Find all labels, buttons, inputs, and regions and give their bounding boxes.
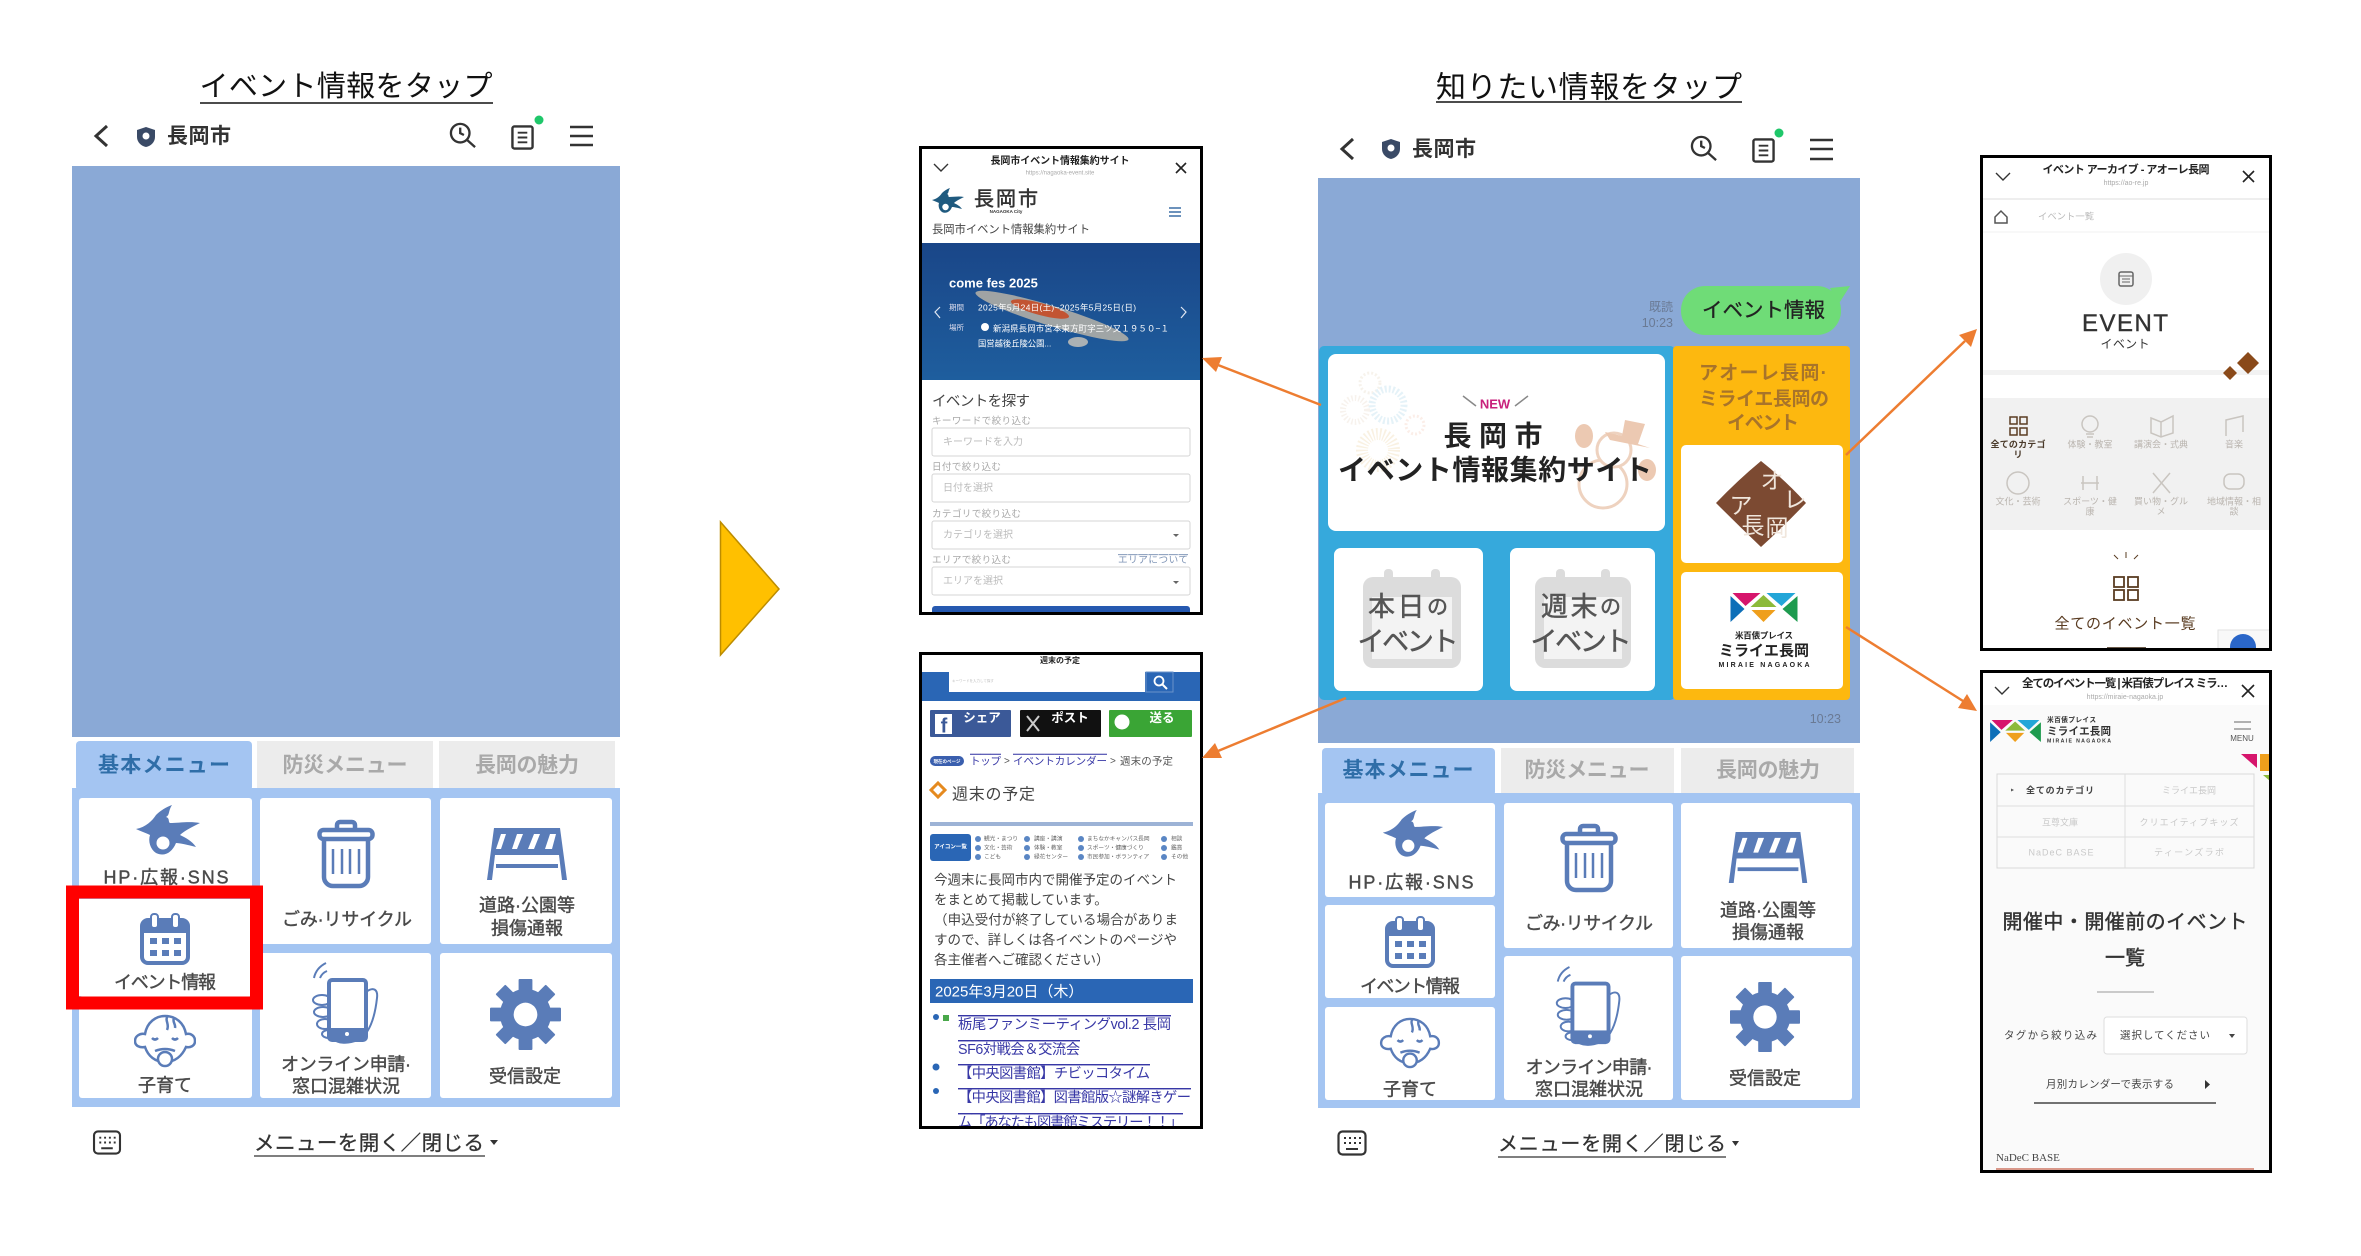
event link list: 【中央図書館】図書館版☆謎解きゲー — [958, 1089, 1191, 1106]
Miraie logo — [1990, 715, 2111, 744]
Miraie browser bar: https://miraie-nagaoka.jp — [2087, 694, 2163, 701]
right menu: online application: オンライン申請· — [1526, 1057, 1652, 1077]
breadcrumb: > — [1004, 756, 1010, 767]
yellow column caption: イベント — [1727, 413, 1799, 434]
chat bubble: 10:23 — [1642, 316, 1673, 330]
weekend page header: 週末の予定 — [1040, 655, 1080, 665]
right phone header bar — [1342, 128, 1833, 162]
left keyboard and toggle: メニューを開く／閉じる — [254, 1132, 484, 1155]
right menu tabs: 長岡の魅力 — [1716, 759, 1820, 782]
all events link — [2054, 552, 2196, 650]
category table: 互尊文庫 — [2042, 817, 2078, 828]
EVENT heading: イベント — [2100, 337, 2150, 351]
arrow: to Aore page — [1846, 329, 1977, 455]
card: Aore Nagaoka: 岡 — [1766, 515, 1788, 541]
menu: road damage report: 道路·公園等 — [479, 895, 575, 915]
panel: Miraie event list screenshot — [1982, 672, 2270, 1172]
intro paragraph: 今週末に長岡市内で開催予定のイベント — [934, 872, 1177, 887]
event search form: カテゴリで絞り込む — [932, 508, 1021, 520]
breadcrumb: 週末の予定 — [1120, 755, 1174, 768]
card: weekend events — [1510, 548, 1655, 691]
intro paragraph: （申込受付が終了している場合がありま — [934, 912, 1178, 927]
next section label: NaDeC BASE — [1996, 1152, 2060, 1164]
weekend page header: キーワードを入力して探す — [952, 678, 994, 683]
menu: garbage recycling — [260, 798, 431, 944]
left menu tabs: 基本メニュー — [98, 754, 230, 777]
event link list: 【中央図書館】チビッコタイム — [958, 1065, 1150, 1082]
right menu tabs: 基本メニュー — [1342, 759, 1474, 782]
menu button and accents: MENU — [2230, 734, 2254, 743]
social share buttons: 送る — [1149, 710, 1175, 725]
card: Miraie Nagaoka: ミライエ長岡 — [1719, 643, 1809, 660]
breadcrumb: > — [1110, 756, 1116, 767]
all events link: 全てのイベント一覧 — [2054, 616, 2196, 633]
yellow column caption: ミライエ長岡の — [1699, 389, 1829, 410]
menu: notification settings: 受信設定 — [489, 1066, 561, 1086]
menu: online application: 窓口混雑状況 — [292, 1076, 400, 1096]
Miraie logo: MIRAIE NAGAOKA — [2047, 738, 2111, 744]
menu: road damage report — [440, 798, 612, 944]
right menu: notification settings: 受信設定 — [1729, 1068, 1801, 1088]
right menu: road damage report — [1681, 803, 1852, 948]
card: weekend events: イベント — [1530, 627, 1632, 657]
intro paragraph: をまとめて掲載しています。 — [934, 892, 1108, 907]
event search form: エリアについて — [1118, 555, 1188, 566]
event link list: ム「あなたも図書館ミステリー！！」 — [958, 1114, 1183, 1131]
event rich message — [1319, 346, 1850, 700]
card: Aore Nagaoka: 長 — [1742, 513, 1764, 539]
left menu tabs: 長岡の魅力 — [475, 754, 579, 777]
right menu tabs — [1322, 748, 1854, 796]
social share buttons: f — [941, 715, 948, 737]
event search form: イベントを探す — [932, 393, 1030, 410]
menu button and accents — [2230, 722, 2270, 781]
menu: road damage report: 損傷通報 — [491, 918, 563, 938]
icon legend: 体験・教室 — [1034, 843, 1063, 851]
site logo — [932, 187, 1181, 236]
monthly calendar link — [2034, 1078, 2216, 1103]
list heading: 一覧 — [2105, 946, 2145, 969]
yellow column caption — [1699, 363, 1829, 434]
right menu: road damage report: 損傷通報 — [1732, 922, 1804, 942]
category grid: 買い物・グル — [2134, 496, 2188, 507]
right phone header bar: 長岡市 — [1412, 138, 1476, 161]
card: city event site — [1328, 354, 1665, 531]
category grid: スポーツ・健 — [2063, 496, 2117, 507]
recaptcha badge — [2218, 630, 2269, 648]
tag filter — [2004, 1017, 2247, 1054]
event search form: キーワードを入力 — [943, 435, 1023, 448]
card: Aore Nagaoka — [1681, 445, 1843, 563]
event search form: キーワードで絞り込む — [932, 415, 1031, 427]
right menu: child rearing — [1325, 1007, 1495, 1100]
menu: online application — [260, 953, 431, 1098]
right menu: notification settings — [1681, 956, 1852, 1100]
hero banner with koi: 新潟県長岡市宮本東方町字三ツ又１９５０−１ — [993, 324, 1169, 334]
right menu: HP広報SNS: HP·広報·SNS — [1348, 872, 1474, 892]
icon legend: 文化・芸術 — [984, 843, 1013, 851]
left chat area — [72, 166, 620, 737]
right menu: road damage report: 道路·公園等 — [1720, 900, 1816, 920]
hero banner with koi: 期間 — [949, 303, 964, 312]
intro paragraph — [934, 872, 1178, 967]
menu: event info: イベント情報 — [114, 972, 216, 992]
card: today's events — [1334, 548, 1483, 691]
site logo: 長岡市 — [974, 187, 1038, 210]
monthly calendar link: 月別カレンダーで表示する — [2046, 1078, 2174, 1091]
category table: ミライエ長岡 — [2162, 786, 2216, 796]
icon legend: スポーツ・健康づくり — [1087, 843, 1144, 851]
icon legend: まちなかキャンパス長岡 — [1087, 835, 1150, 842]
icon legend: その他 — [1171, 852, 1188, 860]
tag filter: タグから絞り込み — [2004, 1029, 2097, 1042]
event link list: 栃尾ファンミーティングvol.2 長岡 — [958, 1016, 1171, 1033]
category grid: 地域情報・相 — [2207, 496, 2261, 507]
menu: garbage recycling: ごみ·リサイクル — [282, 909, 412, 929]
right menu: online application: 窓口混雑状況 — [1535, 1079, 1643, 1099]
card: Aore Nagaoka: レ — [1784, 487, 1806, 513]
left rich menu grid — [72, 788, 620, 1107]
event search form — [932, 393, 1190, 618]
date bar: 2025年3月20日（木） — [935, 984, 1083, 1001]
left phone header bar: 長岡市 — [167, 125, 231, 148]
menu: child rearing — [79, 996, 252, 1098]
right menu: online application — [1504, 956, 1673, 1100]
breadcrumb: イベントカレンダー — [1013, 755, 1107, 768]
event link list — [932, 1014, 1191, 1131]
menu: online application: オンライン申請· — [281, 1054, 411, 1074]
site browser bar: https://nagaoka-event.site — [1026, 170, 1095, 176]
heading: tap info you want: 知りたい情報をタップ — [1436, 72, 1742, 105]
icon legend: こども — [984, 852, 1001, 860]
left menu tabs — [76, 741, 615, 791]
Aore browser bar — [1983, 162, 2269, 199]
date bar — [930, 979, 1193, 1003]
next section label — [1996, 1154, 2254, 1170]
category table: ティーンズラボ — [2154, 847, 2224, 858]
list heading — [2002, 910, 2248, 992]
menu: HP広報SNS — [79, 798, 252, 894]
category table: クリエイティブキッズ — [2140, 817, 2238, 828]
breadcrumb: 現在のページ — [934, 758, 961, 765]
message time: 10:23 — [1810, 712, 1841, 726]
chat bubble — [1642, 286, 1850, 335]
panel: right LINE phone screen — [1318, 128, 1860, 1157]
left phone header bar — [96, 116, 593, 149]
right chat area — [1318, 178, 1860, 743]
Aore browser bar: https://ao-re.jp — [2104, 180, 2148, 187]
Miraie logo: ミライエ長岡 — [2047, 726, 2111, 738]
right keyboard and toggle: メニューを開く／閉じる — [1498, 1133, 1726, 1155]
icon legend — [930, 834, 1188, 861]
right menu: event info — [1325, 905, 1495, 998]
right menu tabs: 防災メニュー — [1524, 759, 1650, 782]
right keyboard and toggle — [1338, 1132, 1739, 1157]
card: weekend events: 週末の — [1541, 592, 1621, 622]
category table: 全てのカテゴリ — [2026, 785, 2094, 796]
list heading: 開催中・開催前のイベント — [2002, 910, 2248, 933]
right menu: child rearing: 子育て — [1383, 1079, 1437, 1099]
tag filter: 選択してください — [2120, 1029, 2210, 1042]
icon legend: 相談 — [1171, 834, 1183, 842]
site logo: 長岡市イベント情報集約サイト — [932, 222, 1090, 236]
panel: event site screenshot — [920, 148, 1202, 618]
Aore browser bar: イベント アーカイブ - アオーレ長岡 — [2042, 162, 2210, 176]
arrow: to event site — [1202, 357, 1321, 405]
arrow: to weekend events — [1202, 698, 1346, 758]
hero banner with koi: 場所 — [949, 322, 964, 332]
card: city event site: 長岡市 — [1444, 420, 1542, 451]
menu: child rearing: 子育て — [138, 1075, 192, 1095]
icon legend: アイコン一覧 — [934, 842, 967, 850]
EVENT heading — [1983, 253, 2269, 380]
Aore breadcrumb — [1983, 211, 2269, 232]
chat bubble: イベント情報 — [1702, 299, 1825, 322]
menu: notification settings — [440, 953, 612, 1098]
icon legend: 緑花センター — [1034, 852, 1068, 860]
menu: event info — [79, 899, 252, 996]
icon legend: 講座・講演 — [1034, 834, 1063, 842]
card: Aore Nagaoka: オ — [1760, 468, 1784, 494]
left menu tabs: 防災メニュー — [282, 754, 408, 777]
Miraie logo: 米百俵プレイス — [2047, 715, 2096, 724]
site browser bar — [934, 154, 1186, 176]
category grid: 体験・教室 — [2067, 439, 2113, 450]
category grid: 講演会・式典 — [2134, 439, 2188, 450]
card: today's events: 本日の — [1368, 592, 1448, 622]
card: Miraie Nagaoka — [1681, 572, 1843, 689]
category table — [1997, 774, 2254, 868]
event search form: 日付で絞り込む — [932, 461, 1001, 473]
Miraie browser bar — [1995, 676, 2254, 701]
intro paragraph: すので、詳しくは各イベントのページや — [934, 932, 1177, 947]
card: Miraie Nagaoka: 米百俵プレイス — [1735, 631, 1793, 641]
breadcrumb — [930, 755, 1174, 768]
social share buttons: ポスト — [1051, 710, 1089, 725]
panel: left LINE phone screen — [72, 116, 620, 1156]
event search form: カテゴリを選択 — [943, 528, 1013, 541]
social share buttons — [930, 710, 1192, 737]
red highlight frame — [72, 892, 256, 1003]
hero banner with koi: come fes 2025 — [949, 275, 1038, 290]
icon legend: 鑑賞 — [1171, 843, 1183, 851]
hero banner with koi: 2025年5月24日(土)~2025年5月25日(日) — [978, 303, 1136, 313]
right menu: garbage recycling: ごみ·リサイクル — [1525, 913, 1653, 933]
panel: Aore event archive screenshot — [1982, 156, 2270, 660]
category grid: 文化・芸術 — [1995, 496, 2041, 507]
left keyboard and toggle — [94, 1131, 498, 1156]
heading: tap event info: イベント情報をタップ — [200, 70, 492, 103]
panel: weekend events screenshot — [920, 654, 1202, 1131]
right menu: garbage recycling — [1504, 803, 1673, 948]
right menu: event info: イベント情報 — [1360, 976, 1460, 996]
arrow: yellow next step — [720, 522, 779, 655]
event search form: 日付を選択 — [943, 481, 993, 494]
category grid: 康 — [2085, 506, 2095, 517]
card: Miraie Nagaoka: MIRAIE NAGAOKA — [1718, 662, 1810, 669]
hero banner with koi: 国営越後丘陵公園... — [978, 339, 1051, 349]
intro paragraph: 各主催者へご確認ください） — [934, 952, 1110, 967]
event search form: エリアで絞り込む — [932, 554, 1011, 566]
Miraie browser bar: 全てのイベント一覧 | 米百俵プレイス ミラ… — [2022, 676, 2228, 690]
social share buttons: シェア — [963, 711, 1001, 725]
right rich menu grid — [1318, 793, 1860, 1108]
breadcrumb: トップ — [970, 756, 1002, 768]
category grid: 音楽 — [2225, 439, 2243, 450]
event search form: エリアを選択 — [943, 574, 1003, 587]
card: city event site: イベント情報集約サイト — [1338, 454, 1652, 485]
category grid: 談 — [2229, 506, 2239, 517]
event link list: SF6対戦会＆交流会 — [958, 1041, 1080, 1058]
category table: NaDeC BASE — [2028, 848, 2094, 858]
site browser bar: 長岡市イベント情報集約サイト — [990, 154, 1130, 167]
menu: HP広報SNS: HP·広報·SNS — [104, 867, 228, 887]
category grid: 全てのカテゴ — [1990, 439, 2046, 450]
category grid: リ — [2013, 450, 2023, 460]
category grid: メ — [2156, 507, 2166, 517]
page heading weekend: 週末の予定 — [952, 786, 1035, 804]
weekend page header — [922, 655, 1200, 701]
card: Aore Nagaoka: ア — [1730, 493, 1752, 519]
icon legend: 観光・まつり — [984, 834, 1018, 842]
card: city event site: NEW — [1480, 396, 1511, 411]
site logo: NAGAOKA City — [990, 209, 1023, 214]
card: today's events: イベント — [1358, 627, 1458, 657]
EVENT heading: EVENT — [2082, 310, 2168, 337]
Aore breadcrumb: イベント一覧 — [2038, 211, 2094, 222]
category grid — [1983, 398, 2269, 530]
hero banner with koi — [922, 243, 1200, 380]
page heading weekend — [930, 783, 1193, 826]
arrow: to Miraie page — [1846, 627, 1977, 711]
category table: ▸ — [2011, 787, 2014, 793]
icon legend: 市民参加・ボランティア — [1087, 852, 1150, 860]
yellow column caption: アオーレ長岡· — [1699, 363, 1827, 384]
right menu: HP広報SNS — [1325, 803, 1495, 897]
chat bubble: 既読 — [1649, 300, 1673, 314]
